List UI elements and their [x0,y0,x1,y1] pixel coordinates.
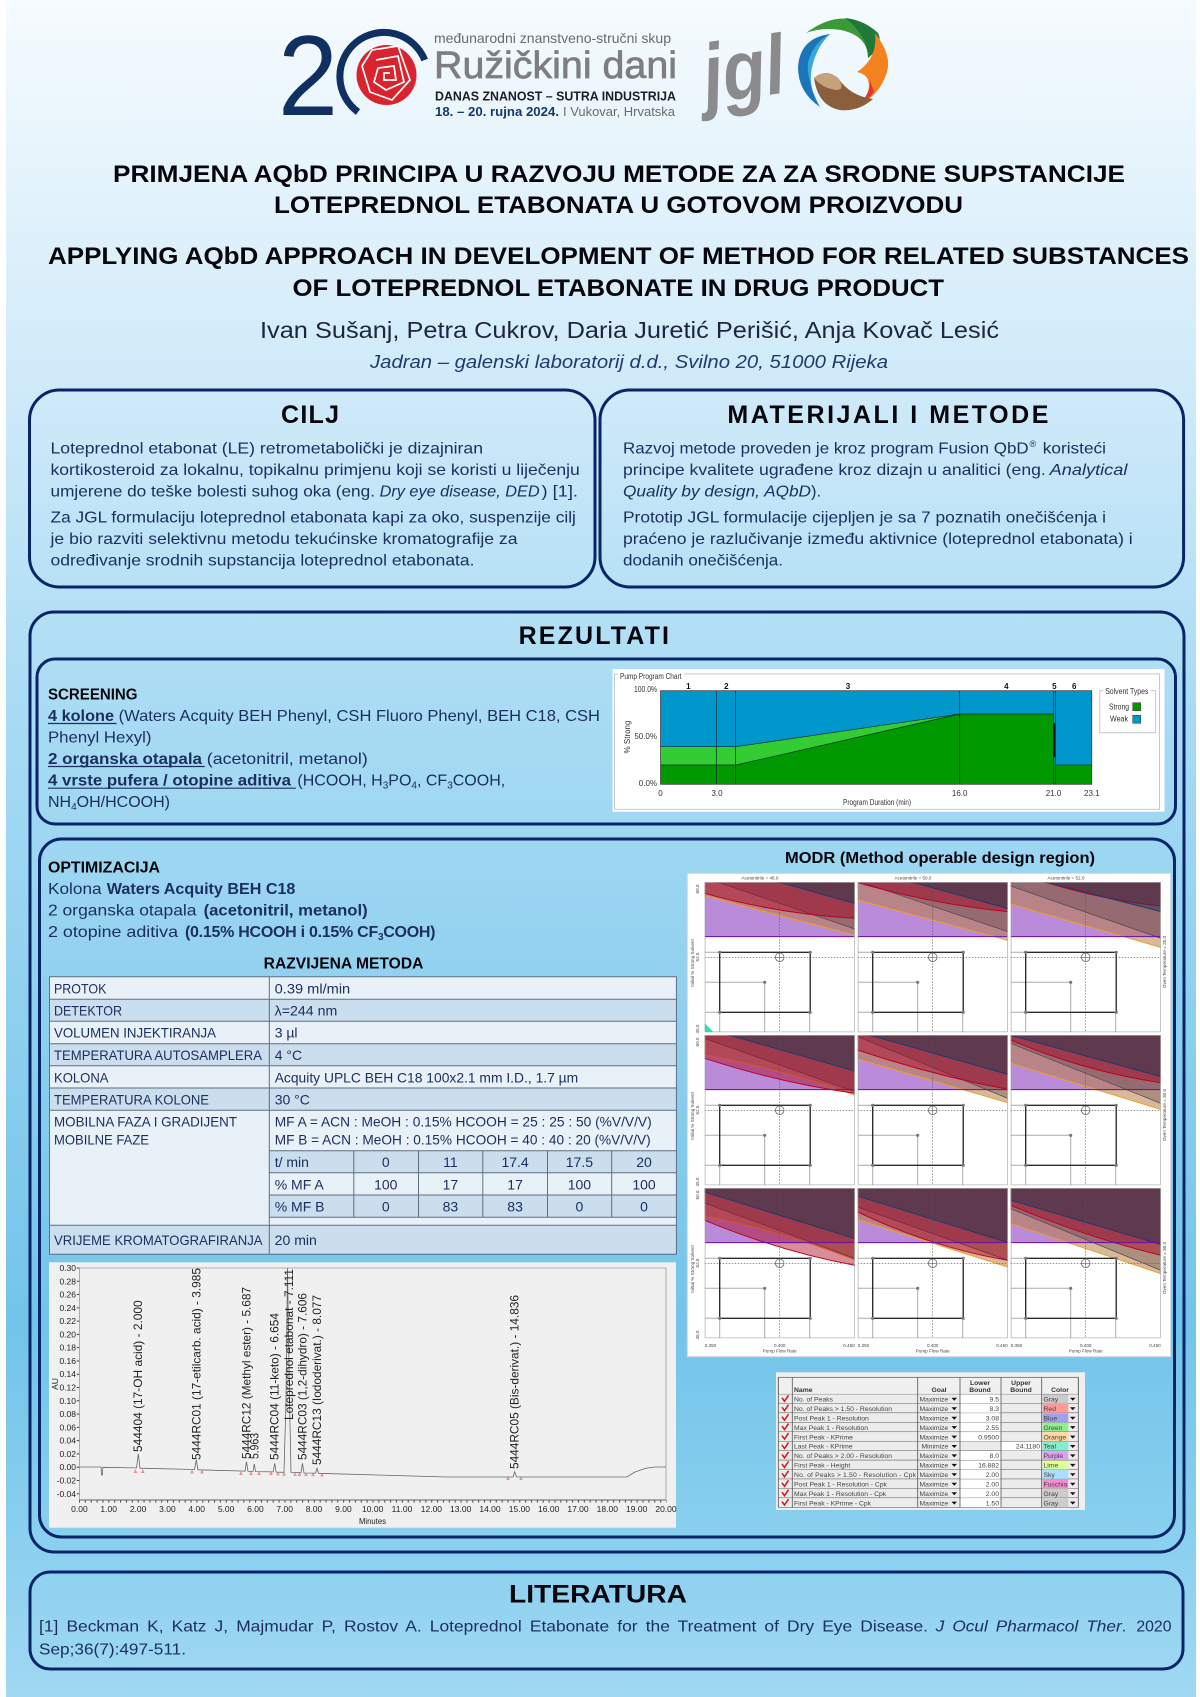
y axis labels: 0.20 [59,1329,76,1339]
text block: optimizacija: 3 [378,932,384,943]
logo: Ruzickini dani 20: DANAS ZNANOST – SUTRA INDUSTRIJA [435,90,676,104]
table: optimisation goals: 2.00 [986,1472,999,1479]
text block: cilj: ) [1]. [542,484,578,501]
table: razvijena metoda: t/ min [275,1154,309,1170]
table: optimisation goals: 2.00 [986,1482,999,1488]
chart: pump program: 100.0% [634,685,657,694]
table: razvijena metoda: 20 min [275,1232,317,1248]
table: optimisation goals: 2.55 [986,1425,999,1432]
reference: [1] Beckman K, Katz J, Majmudar P, Rostov A. Loteprednol Etabonate for the Treatment of Dry Eye Disease. [39,1619,928,1636]
table: optimisation goals: Maximize [920,1500,948,1507]
text block: optimizacija: (0.15% HCOOH i 0.15% CF [185,924,378,941]
table: optimisation goals: Minimize [922,1444,949,1451]
x axis labels: 10.00 [362,1504,384,1514]
reference [39,1619,1172,1658]
table: razvijena metoda: Acquity UPLC BEH C18 100x2.1 mm I.D., 1.7 µm [275,1069,578,1085]
text block: optimizacija: COOH) [383,924,435,941]
icon: jgl swirl [798,18,888,110]
peak labels: 5444RC01 (17-etilcarb. acid) - 3.985 [189,1268,203,1460]
y axis labels: 0.16 [59,1356,76,1366]
text block: cilj: određivanje srodnih supstancija loteprednol etabonata. [50,553,474,570]
table: optimisation goals: Maximize [920,1482,948,1488]
x axis labels: 19.00 [626,1504,648,1514]
heading: rezultati: REZULTATI [519,622,669,650]
text block: optimizacija: (acetonitril, metanol) [204,902,368,919]
table: optimisation goals: 2.00 [986,1491,999,1498]
legend: solvent types: Solvent Types [1105,687,1148,696]
table: optimisation goals: Purple [1044,1453,1063,1460]
heading: cilj: CILJ [281,401,339,429]
text block: materijali i metode: Quality by design, AQbD [623,484,811,501]
axis labels: Pump Flow Rate [916,1348,950,1354]
chart: chromatogram: AU [50,1378,60,1390]
plot: row 2 col 2 [858,1035,1008,1186]
table: optimisation goals: Maximize [920,1463,948,1470]
table: optimisation goals: Maximize [920,1453,948,1460]
table: razvijena metoda: 20 [636,1154,652,1170]
table: razvijena metoda: 17 [443,1176,458,1192]
y axis labels: -0.02 [57,1476,76,1486]
text block: materijali i metode: principe kvalitete ugrađene kroz dizajn u analitici (eng. [623,462,1046,479]
text block: cilj [49,440,580,570]
text block: screening: (HCOOH, H [297,773,383,790]
y axis labels: 0.28 [59,1276,76,1286]
title: Croatian: LOTEPREDNOL ETABONATA U GOTOVOM PROIZVODU [274,192,963,219]
peak labels: 544404 (17-OH acid) - 2.000 [131,1300,145,1452]
table: razvijena metoda: 17.5 [566,1154,593,1170]
axis labels: 45.0 [695,1177,700,1186]
legend: solvent types: Weak [1110,715,1129,724]
axis labels: Initial % Strong Solvent [690,1245,695,1293]
x axis labels: 6.00 [247,1504,264,1514]
x axis labels: 16.00 [538,1504,560,1514]
axis labels: 0.350 [705,1343,717,1348]
x axis labels: 8.00 [306,1504,323,1514]
table: razvijena metoda: KOLONA [54,1069,109,1085]
table: optimisation goals: Maximize [920,1491,948,1498]
table: optimisation goals: 24.1180 [1016,1444,1040,1451]
text block: screening: PO [388,773,411,790]
table: razvijena metoda: 30 °C [275,1091,310,1107]
table: optimisation goals: No. of Peaks > 1.50 - Resolution [794,1406,892,1413]
axis labels: 0.350 [858,1343,870,1348]
chart: pump program: Pump Program Chart [620,672,682,681]
y axis labels: 0.00 [59,1462,76,1472]
y axis labels: 0.04 [59,1436,76,1446]
table: optimisation goals: Color [1051,1387,1069,1394]
text block: cilj: kortikosteroid za lokalnu, topikalnu primjenu koji se koristi u liječenju [50,462,580,479]
legend: solvent types [1100,687,1156,733]
title: Croatian: PRIMJENA AQbD PRINCIPA U RAZVOJU METODE ZA ZA SRODNE SUPSTANCIJE [113,161,1125,188]
y axis labels: 0.06 [59,1422,76,1432]
table: optimisation goals: Post Peak 1 - Resolution - Cpk [794,1482,888,1488]
table: razvijena metoda: 4 °C [275,1047,302,1063]
table: optimisation goals: 8.0 [990,1453,999,1460]
table: razvijena metoda: 83 [443,1199,458,1215]
text block: optimizacija: 2 otopine aditiva [48,924,178,941]
logo: Ruzickini dani 20: 2 [278,13,338,140]
peak labels: Loteprednol etabonat - 7.111 [282,1269,296,1420]
peak labels: 5444RC12 (Methyl ester) - 5.687 [240,1287,254,1459]
chart: pump program: 16.0 [952,789,968,798]
logo: JGL [688,17,888,123]
axis labels: 60.0 [695,1190,700,1199]
table: razvijena metoda: 0 [382,1154,390,1170]
logo: Ruzickini dani 20 [278,13,677,140]
plot: row 3 col 3 [1010,1188,1161,1338]
chart: pump program: 3 [846,682,851,691]
table: optimisation goals: Bound [1010,1387,1032,1394]
text block: cilj: umjerene do teške bolesti suhog oka (eng. [50,484,375,501]
chart: MODR design space grid [687,852,1171,1357]
y axis labels: -0.04 [57,1489,76,1499]
text block: materijali i metode [623,439,1133,570]
table: optimisation goals: First Peak - KPrime - Cpk [794,1500,872,1507]
axis labels: Pump Flow Rate [763,1348,797,1354]
text block: materijali i metode: praćeno je razlučivanje između aktivnice (loteprednol etabonata) i [623,531,1133,548]
text block: materijali i metode: Prototip JGL formulacije cijepljen je sa 7 poznatih onečišćenja i [623,509,1106,526]
table: optimisation goals: Maximize [920,1434,948,1441]
table: razvijena metoda: DETEKTOR [54,1002,122,1018]
text block: screening: 4 vrste pufera / otopine aditiva [48,773,291,790]
panel: cilj [30,390,595,587]
table: razvijena metoda: 83 [507,1199,523,1215]
table: optimisation goals: Gray [1044,1500,1059,1507]
text block: screening: 4 [71,802,77,813]
table: optimisation goals: Teal [1044,1444,1056,1451]
table: optimisation goals: Gray [1044,1491,1059,1498]
reference: J Ocul Pharmacol Ther [935,1619,1122,1636]
text block: cilj: Za JGL formulaciju loteprednol etabonata kapi za oko, suspenzije cilj [50,509,576,526]
plot: row 1 col 2 [858,882,1008,1032]
axis labels: 0.450 [1149,1343,1161,1348]
text block: optimizacija: Kolona [48,881,102,898]
table: optimisation goals: No. of Peaks [794,1396,834,1404]
table: razvijena metoda: 0 [382,1199,390,1215]
axis labels: Initial % Strong Solvent [690,939,695,987]
panel: screening [37,659,1176,824]
logo: Ruzickini dani 20: Ružičkini dani [434,45,677,87]
text block: screening: COOH, [453,773,505,790]
x axis labels: 12.00 [421,1504,442,1514]
axis labels: 60.0 [695,1037,700,1046]
table: optimisation goals: First Peak - Height [794,1463,850,1470]
text block: cilj: Loteprednol etabonat (LE) retrometabolički je dizajniran [50,440,483,457]
table: razvijena metoda: λ=244 nm [275,1002,337,1018]
logo: JGL: jgl [688,17,792,123]
text block: optimizacija: Waters Acquity BEH C18 [107,881,295,898]
table: optimisation goals: Last Peak - KPrime [794,1444,853,1451]
table: optimisation goals: Green [1044,1425,1063,1432]
x axis labels: 3.00 [159,1504,176,1514]
y axis labels: 0.12 [59,1382,76,1392]
chart: pump program: 0 [658,789,663,798]
text block: optimizacija: OPTIMIZACIJA [48,859,160,876]
table: optimisation goals: Blue [1044,1415,1057,1422]
peak labels [131,1268,522,1469]
table: razvijena metoda: 0 [640,1199,648,1215]
table: razvijena metoda: MF A = ACN : MeOH : 0.15% HCOOH = 25 : 25 : 50 (%V/V/V) [275,1114,652,1130]
table: optimisation goals: Fuschia [1044,1482,1068,1488]
table: optimisation goals: Lime [1044,1463,1058,1470]
panel: rezultati [30,612,1184,1552]
table: optimisation goals: 8.3 [990,1406,999,1413]
table: optimisation goals: Gray [1044,1396,1059,1404]
table: optimisation goals: Maximize [920,1406,948,1413]
table: optimisation goals: Sky [1044,1472,1055,1479]
legend: solvent types: Strong [1109,702,1129,711]
table: optimisation goals: Maximize [920,1396,948,1404]
axis labels: Oven Temperature = 30.0 [1162,1088,1167,1141]
axis labels: Acetonitrile = 48.0 [742,876,779,880]
text block: screening: 3 [447,781,453,792]
text block: screening: Phenyl Hexyl) [48,729,151,746]
axis labels: Initial % Strong Solvent [690,1092,695,1140]
logo: Ruzickini dani 20: međunarodni znanstveno-stručni skup [434,30,671,46]
reference: Sep;36(7):497-511. [39,1641,186,1658]
axis labels: 45.0 [695,1330,700,1339]
logo: Ruzickini dani 20: I Vukovar, Hrvatska [563,104,676,119]
text block: screening: SCREENING [48,686,138,703]
text block: screening: OH/HCOOH) [77,794,170,811]
chart: pump program: 6 [1072,682,1077,691]
axis labels: 0.350 [1011,1343,1023,1348]
table: optimisation goals: Maximize [920,1425,948,1432]
chart: pump program: 1 [686,682,691,691]
table: optimisation goals [776,1372,1085,1510]
table: razvijena metoda: TEMPERATURA KOLONE [54,1091,209,1107]
text block: materijali i metode: Analytical [1049,462,1128,479]
table: razvijena metoda: 17.4 [501,1154,529,1170]
table: razvijena metoda: 0.39 ml/min [275,980,350,996]
text block: screening: (acetonitril, metanol) [207,751,368,768]
table: razvijena metoda: 3 µl [275,1025,298,1041]
table: razvijena metoda: VRIJEME KROMATOGRAFIRANJA [54,1232,263,1248]
y axis labels: 0.26 [59,1290,76,1300]
text block: screening: (Waters Acquity BEH Phenyl, CSH Fluoro Phenyl, BEH C18, CSH [119,708,600,725]
plot: row 3 col 2 [858,1188,1008,1338]
chart: pump program: 21.0 [1046,789,1062,798]
x axis labels: 7.00 [276,1504,293,1514]
table: razvijena metoda: 11 [443,1154,458,1170]
x axis labels: 1.00 [100,1504,117,1514]
panel: materijali i metode [600,390,1184,587]
text block: screening: , CF [417,773,447,790]
text block: screening: 4 kolone [48,708,114,725]
table: optimisation goals: No. of Peaks > 2.00 - Resolution [794,1453,892,1460]
axis labels: 52.5 [695,1258,700,1267]
y axis labels: 0.08 [59,1409,76,1419]
peak labels: 5444RC03 (1,2-dihydro) - 7.606 [295,1293,309,1460]
plot: row 1 col 1 [704,882,855,1032]
table: razvijena metoda: 0 [576,1199,584,1215]
table: razvijena metoda: 17 [507,1176,523,1192]
panel: literatura [30,1572,1183,1669]
affiliation: Jadran – galenski laboratorij d.d., Svilno 20, 51000 Rijeka [369,352,888,372]
table: optimisation goals: Orange [1044,1434,1066,1441]
peak integration markers [134,1470,522,1480]
axis labels: 45.0 [695,1024,700,1033]
axis labels: Pump Flow Rate [1069,1348,1103,1354]
text block: screening: 3 [383,781,389,792]
chart: pump program: 23.1 [1084,789,1100,798]
title: English [48,243,1189,302]
table: optimisation goals: 3.08 [986,1415,999,1422]
axis labels: 52.5 [695,952,700,961]
text block: materijali i metode: koristeći [1043,440,1106,457]
table: optimisation goals: Max Peak 1 - Resolution - Cpk [794,1491,887,1498]
x axis labels: 18.00 [597,1504,618,1514]
y axis labels: 0.18 [59,1343,76,1353]
table: razvijena metoda: PROTOK [54,980,107,996]
x axis labels: 0.00 [71,1504,88,1514]
axis labels: Oven Temperature = 35.0 [1162,1241,1167,1294]
peak labels: 5444RC04 (11-keto) - 6.654 [268,1313,282,1460]
axis labels: Acetonitrile = 52.0 [1048,876,1085,880]
table: optimisation goals: 0.9500 [978,1434,999,1441]
x axis labels [71,1504,677,1514]
plot: row 3 col 1 [704,1188,855,1338]
table: optimisation goals: Lower [970,1380,990,1387]
x axis labels: 9.00 [335,1504,352,1514]
text block: screening: NH [48,794,71,811]
table: razvijena metoda: TEMPERATURA AUTOSAMPLERA [54,1047,263,1063]
table: razvijena metoda: 100 [374,1176,398,1192]
table: optimisation goals: Red [1044,1406,1056,1413]
x axis labels: 11.00 [392,1504,413,1514]
table: optimisation goals: First Peak - KPrime [794,1434,853,1441]
heading: razvijena metoda: RAZVIJENA METODA [264,955,423,972]
peak labels: 5444RC05 (Bis-derivat.) - 14.836 [508,1295,522,1469]
y axis labels: 0.30 [59,1263,76,1273]
chart: pump program: 4 [1004,682,1009,691]
chromatogram trace [79,1268,666,1477]
y axis labels: 0.14 [59,1369,76,1379]
plot: row 1 col 3 [1010,882,1161,1032]
y axis labels: 0.22 [59,1316,76,1326]
authors: Ivan Sušanj, Petra Cukrov, Daria Juretić Perišić, Anja Kovač Lesić [260,317,999,343]
chart: pump program: 3.0 [711,789,723,798]
table: optimisation goals: Post Peak 1 - Resolution [794,1415,869,1422]
heading: materijali i metode: MATERIJALI I METODE [727,401,1048,429]
table: razvijena metoda: % MF A [275,1176,324,1192]
text block: materijali i metode: dodanih onečišćenja. [623,553,783,570]
table: optimisation goals: 1.50 [986,1500,999,1507]
y axis labels: 0.24 [59,1303,76,1313]
text block: cilj: Dry eye disease, DED [380,484,540,501]
y axis labels: 0.10 [59,1396,76,1406]
axis labels: Acetonitrile = 50.0 [895,876,932,880]
chart: pump program: % Strong [623,721,632,753]
chart: chromatogram: Minutes [359,1516,386,1526]
title: Croatian [113,161,1125,219]
heading: literatura: LITERATURA [509,1581,687,1609]
table: optimisation goals: Maximize [920,1472,948,1479]
text block: screening: 4 [411,781,417,792]
table: optimisation goals: Goal [931,1387,947,1394]
table: optimisation goals: 16.882 [978,1463,999,1470]
chart: pump program: 50.0% [634,732,657,741]
title: English: APPLYING AQbD APPROACH IN DEVELOPMENT OF METHOD FOR RELATED SUBSTANCES [48,243,1189,270]
text block: materijali i metode: ). [811,484,821,501]
plot: row 2 col 1 [704,1035,855,1186]
text block: materijali i metode: ® [1030,439,1036,449]
axis labels: 0.450 [996,1343,1008,1348]
x axis labels: 2.00 [130,1504,147,1514]
table: optimisation goals: 9.5 [990,1396,999,1404]
axis labels: 52.5 [695,1105,700,1114]
x axis labels: 13.00 [450,1504,472,1514]
table: optimisation goals: Max Peak 1 - Resolution [794,1425,868,1432]
table: optimisation goals: Bound [969,1387,991,1394]
plot: row 2 col 3 [1010,1035,1161,1186]
axis labels: 0.400 [927,1343,939,1348]
table: razvijena metoda: MOBILNA FAZA I GRADIJENT [54,1114,237,1130]
title: English: OF LOTEPREDNOL ETABONATE IN DRUG PRODUCT [292,275,944,302]
text block: optimizacija [48,859,435,943]
heading: MODR: MODR (Method operable design region) [785,850,1095,867]
table: razvijena metoda: % MF B [275,1199,324,1215]
axis labels [690,876,1167,1354]
chart: pump program: 0.0% [639,779,657,788]
x axis labels: 17.00 [567,1504,589,1514]
text block: screening: 2 organska otapala [48,751,202,768]
x axis labels: 5.00 [218,1504,235,1514]
peak labels: 5.963 [247,1433,261,1459]
table: razvijena metoda [50,977,676,1254]
x axis labels: 4.00 [188,1504,205,1514]
axis labels: 0.400 [1080,1343,1092,1348]
panel: optimizacija [40,839,1174,1537]
table: razvijena metoda: 100 [568,1176,591,1192]
chart: chromatogram [49,1262,677,1528]
table: optimisation goals: Name [794,1387,813,1394]
y axis labels: 0.02 [59,1449,76,1459]
x axis labels: 15.00 [509,1504,530,1514]
text block: optimizacija: 2 organska otapala [48,902,197,919]
reference: . 2020 [1122,1619,1172,1636]
table: razvijena metoda: 100 [632,1176,656,1192]
x axis labels: 20.00 [655,1504,677,1514]
chart: pump program [613,669,1164,812]
axis labels: 0.400 [774,1343,786,1348]
axis labels: Oven Temperature = 25.0 [1162,935,1167,988]
table: optimisation goals: No. of Peaks > 1.50 - Resolution - Cpk [794,1472,917,1479]
axis labels: 0.450 [843,1343,855,1348]
table: razvijena metoda: MF B = ACN : MeOH : 0.15% HCOOH = 40 : 40 : 20 (%V/V/V) [275,1132,651,1148]
x axis labels: 14.00 [479,1504,501,1514]
axis labels: 60.0 [695,884,700,893]
chart: pump program: 5 [1052,682,1057,691]
y axis labels [57,1263,76,1499]
peak labels: 5444RC13 (Iododerivat.) - 8.077 [310,1295,324,1465]
text block: cilj: je bio razviti selektivnu metodu tekućinske kromatografije za [49,531,518,548]
text block: screening [48,686,600,813]
logo: Ruzickini dani 20: 18. – 20. rujna 2024. [435,104,559,119]
chart: pump program: 2 [724,682,729,691]
table: razvijena metoda: VOLUMEN INJEKTIRANJA [54,1025,217,1041]
table: razvijena metoda: MOBILNE FAZE [54,1132,149,1148]
text block: materijali i metode: Razvoj metode proveden je kroz program Fusion QbD [623,440,1029,457]
table: optimisation goals: Upper [1011,1380,1031,1387]
table: optimisation goals: Maximize [920,1415,948,1422]
chart: pump program: Program Duration (min) [843,798,911,807]
